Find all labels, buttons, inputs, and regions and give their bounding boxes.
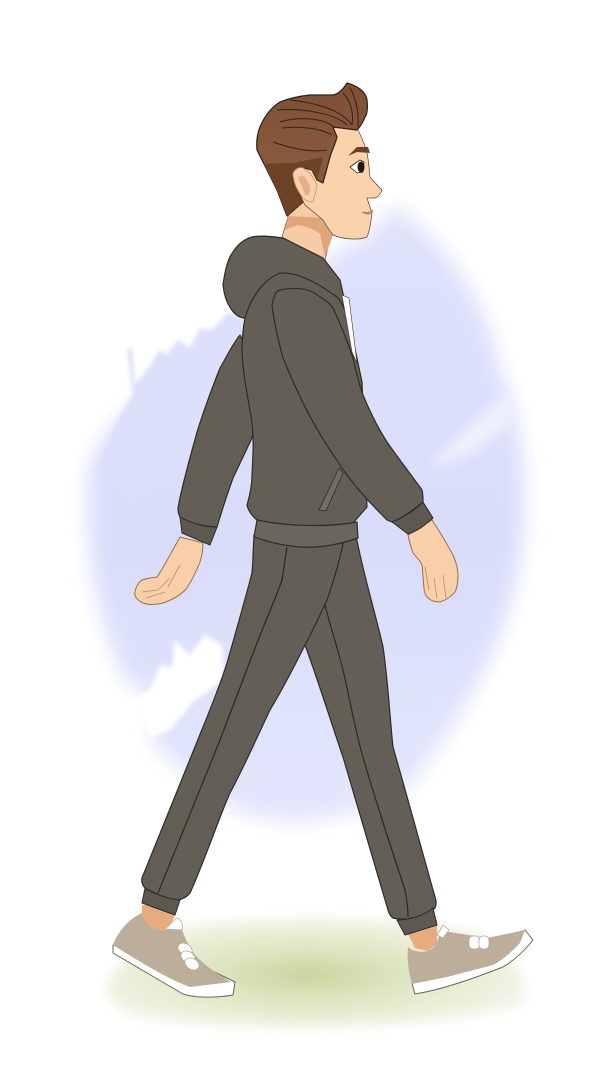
pocket	[319, 468, 343, 511]
mouth	[362, 210, 373, 214]
front shoe	[408, 925, 533, 994]
face	[290, 125, 382, 239]
eyebrow	[348, 147, 370, 156]
front foot	[405, 920, 533, 994]
front arm	[272, 288, 458, 602]
front hand	[408, 520, 458, 602]
back foot	[113, 905, 235, 997]
back arm	[135, 335, 262, 604]
hood	[223, 236, 350, 325]
back foot skin	[142, 905, 178, 932]
trousers: near leg	[142, 535, 345, 915]
shoe straps	[165, 918, 201, 973]
watercolor background: green ground patch	[108, 919, 524, 1027]
head	[257, 83, 382, 239]
waistband	[254, 520, 358, 547]
back shoe	[113, 913, 235, 997]
eye	[350, 160, 364, 173]
white drawstring	[342, 295, 357, 363]
watercolor: light streaks	[425, 395, 515, 470]
neck	[282, 190, 333, 260]
trousers: far leg	[305, 535, 437, 935]
watercolor background: blue blob	[88, 205, 524, 821]
back hand	[135, 537, 203, 604]
watercolor: white brush patch	[135, 635, 224, 738]
ear	[293, 168, 317, 202]
hair	[257, 83, 367, 216]
hoodie body	[223, 236, 367, 547]
watercolor: jagged upper-left brush edge	[95, 312, 260, 500]
torso	[242, 273, 367, 527]
